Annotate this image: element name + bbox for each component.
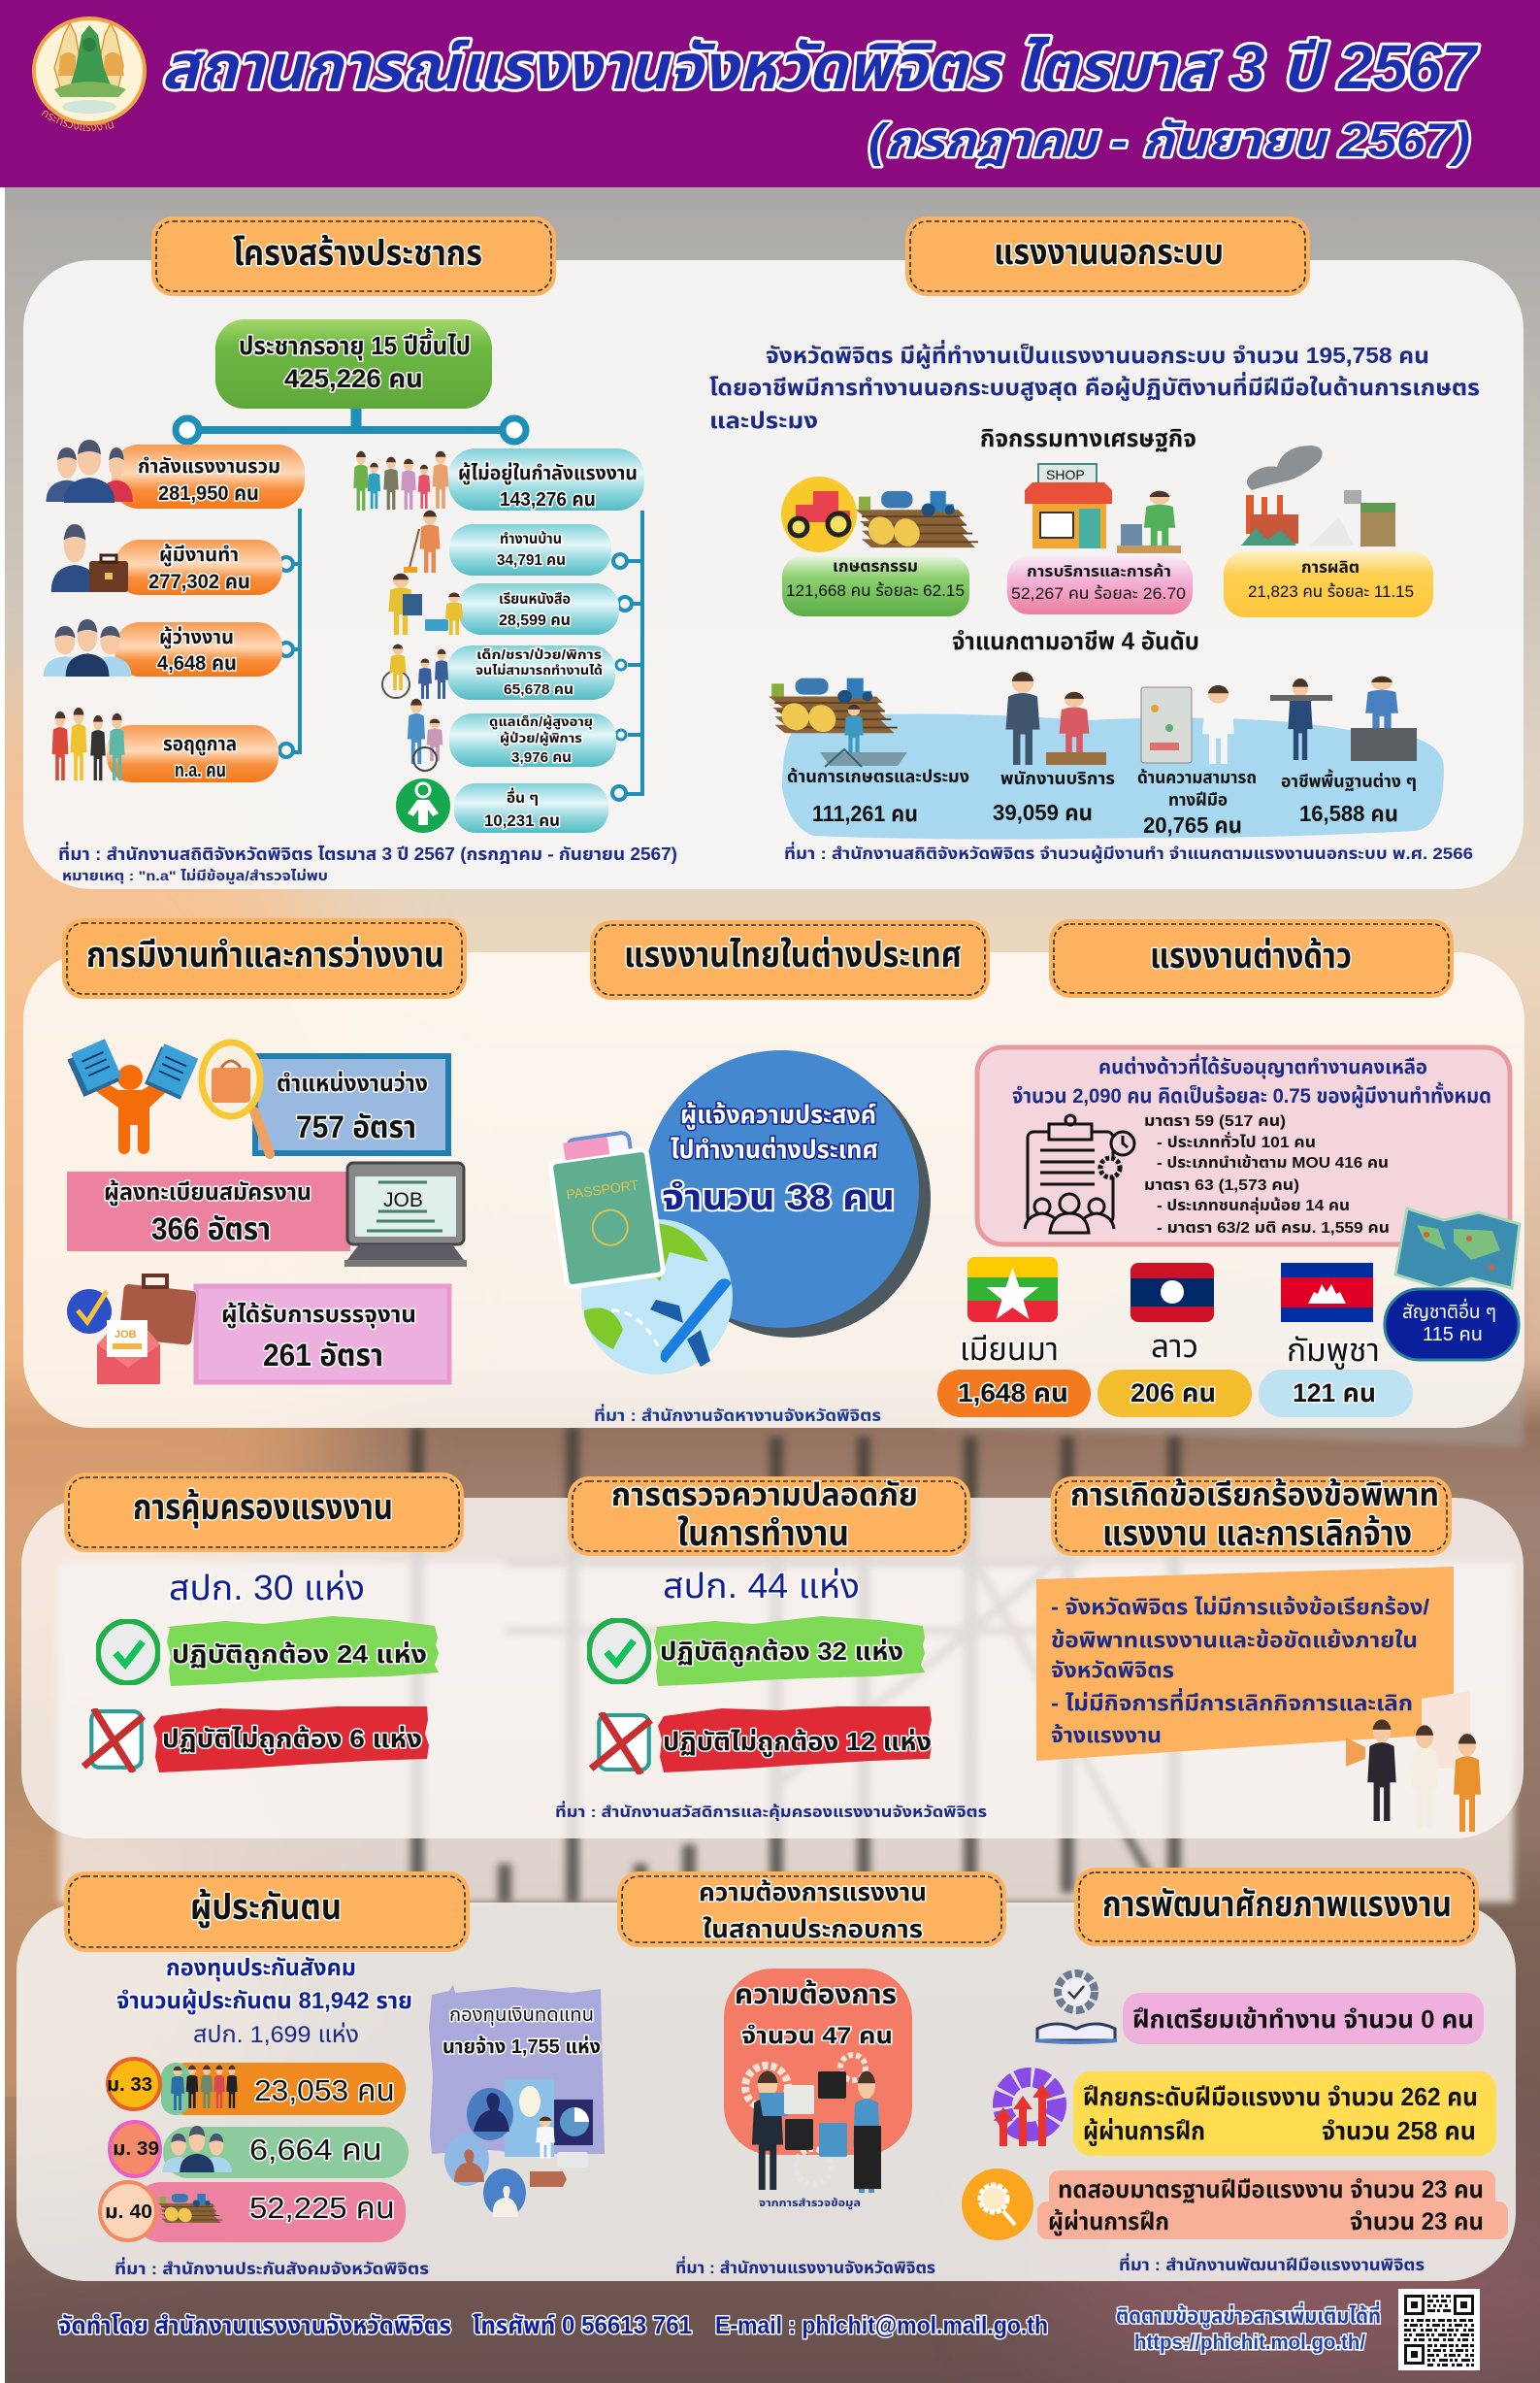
dispute note: จังหวัดพิจิตร [1051, 1658, 1174, 1682]
compliant: protection [98, 1616, 439, 1686]
job vacancies: ตำแหน่งงานว่าง [277, 1070, 428, 1097]
icon: passport [547, 1130, 664, 1287]
studying [458, 583, 619, 635]
occupation labels: ทางฝีมือ [1168, 790, 1228, 810]
icon: farming and fishing [769, 678, 907, 767]
caregiving: ดูแลเด็ก/ผู้สูงอายุ [489, 714, 593, 731]
skill standard test [1037, 2170, 1508, 2239]
foreign worker summary box: - ประเภททั่วไป 101 คน [1157, 1132, 1316, 1151]
pre-employment training: ฝึกเตรียมเข้าทำงาน จำนวน 0 คน [1132, 2004, 1474, 2034]
icon: purple gear with arrows [994, 2077, 1057, 2146]
heading: labour demand: ในสถานประกอบการ [703, 1914, 923, 1943]
not in labour force [448, 448, 644, 511]
icon: factory [1241, 446, 1395, 546]
population total box: ประชากรอายุ 15 ปีขึ้นไป [239, 328, 471, 361]
job applicants: 366 อัตรา [151, 1211, 271, 1246]
heading: disputes [1051, 1476, 1452, 1556]
workmen compensation fund: นายจ้าง 1,755 แห่ง [442, 2036, 601, 2058]
icon: magnifier and bag [202, 1043, 270, 1154]
caregiving: ผู้ป่วย/ผู้พิการ [500, 731, 582, 747]
icon: shop: SHOP [1046, 467, 1085, 482]
others: 10,231 คน [484, 811, 560, 830]
foreign worker summary box: มาตรา 63 (1,573 คน) [1144, 1177, 1299, 1194]
workmen compensation fund: กองทุนเงินทดแทน [449, 2004, 594, 2026]
occupation labels: 39,059 คน [993, 800, 1093, 825]
icon: laptop with job [344, 1163, 467, 1267]
value pill: Cambodia [1259, 1370, 1413, 1417]
panel: insured, demand and skills [16, 1868, 1516, 2281]
non-compliant: protection: ปฏิบัติไม่ถูกต้อง 6 แห่ง [162, 1724, 422, 1754]
child elder sick disabled: เด็ก/ชรา/ป่วย/พิการ [476, 647, 602, 662]
placements: ผู้ได้รับการบรรจุงาน [221, 1301, 416, 1329]
heading: disputes: แรงงาน และการเลิกจ้าง [1102, 1513, 1412, 1553]
icon: employed man [51, 524, 128, 592]
survey note: จากการสำรวจข้อมูล [759, 2197, 861, 2209]
studying: 28,599 คน [499, 612, 571, 629]
overseas workers circle: ไปทำงานต่างประเทศ [671, 1135, 878, 1164]
employed [115, 540, 282, 595]
icon: family [353, 451, 448, 511]
icon: wheelchair and elders [382, 645, 448, 699]
housework: 34,791 คน [497, 552, 566, 569]
panel: employment, overseas and foreign workers [23, 918, 1524, 1428]
non-compliant: protection [83, 1706, 429, 1772]
service and trade value [1007, 556, 1193, 614]
heading: population structure: โครงสร้างประชากร [233, 233, 482, 273]
icon: basic workers [1270, 677, 1417, 761]
child elder sick disabled: จนไม่สามารถทำงานได้ [475, 662, 603, 678]
footer: website: https://phichit.mol.go.th/ [1134, 2332, 1365, 2354]
heading: informal labour: แรงงานนอกระบบ [994, 232, 1224, 272]
occupation labels: 16,588 คน [1299, 801, 1398, 826]
manufacturing value: การผลิต [1301, 558, 1360, 577]
labour demand card: จำนวน 47 คน [741, 2023, 893, 2049]
icon: technician [1141, 685, 1234, 764]
source: labour office: ที่มา : สำนักงานแรงงานจังหวัดพิจิตร [675, 2256, 935, 2277]
social security fund text: กองทุนประกันสังคม [166, 1955, 356, 1982]
article 40 bar [100, 2182, 406, 2242]
social security fund text: จำนวนผู้ประกันตน 81,942 ราย [116, 1987, 412, 2015]
population total box: 425,226 คน [284, 364, 423, 393]
connector tree [176, 409, 642, 800]
foreign worker summary box: มาตรา 59 (517 คน) [1144, 1113, 1286, 1130]
compliant: safety: ปฏิบัติถูกต้อง 32 แห่ง [660, 1637, 903, 1667]
occupation labels: พนักงานบริการ [1000, 769, 1115, 788]
compliant: protection: ปฏิบัติถูกต้อง 24 แห่ง [172, 1639, 427, 1670]
country labels: ลาว [1151, 1328, 1198, 1364]
article 40 bar: 52,225 คน [249, 2191, 395, 2225]
other nationalities: สัญชาติอื่น ๆ [1402, 1298, 1496, 1323]
housework: ทำงานบ้าน [500, 530, 562, 547]
icon: world map [1395, 1208, 1520, 1288]
unemployed: ผู้ว่างงาน [159, 627, 234, 648]
icon: unemployed people [44, 619, 131, 677]
country labels: กัมพูชา [1287, 1332, 1380, 1370]
icon: caregiver [408, 699, 442, 771]
ministry logo: กระทรวงแรงงาน [41, 111, 115, 132]
panel: population and informal labour [23, 216, 1524, 889]
country labels: เมียนมา [960, 1331, 1059, 1367]
job applicants: ผู้ลงทะเบียนสมัครงาน [104, 1178, 311, 1207]
child elder sick disabled [447, 645, 615, 700]
article 33 bar: ม. 33 [107, 2074, 152, 2096]
agriculture value: 121,668 คน ร้อยละ 62.15 [786, 580, 965, 600]
occupation labels: 111,261 คน [812, 801, 918, 826]
icon: students [388, 574, 463, 635]
occupation labels: อาชีพพื้นฐานต่าง ๆ [1281, 769, 1417, 791]
occupation labels: ด้านการเกษตรและประมง [787, 767, 969, 786]
source: skill development: ที่มา : สำนักงานพัฒนาฝีมือแรงงานพิจิตร [1119, 2253, 1425, 2274]
heading: insured persons [64, 1871, 470, 1952]
informal labour paragraph: จังหวัดพิจิตร มีผู้ที่ทำงานเป็นแรงงานนอกระบบ จำนวน 195,758 คน [766, 340, 1429, 369]
non-compliant: safety: ปฏิบัติไม่ถูกต้อง 12 แห่ง [663, 1727, 932, 1757]
QR code [1398, 2289, 1480, 2370]
overseas workers circle: ผู้แจ้งความประสงค์ [680, 1100, 876, 1130]
foreign worker summary box: - ประเภทชนกลุ่มน้อย 14 คน [1157, 1197, 1350, 1214]
skill upgrade training [1073, 2071, 1496, 2156]
seasonal: n.a. คน [175, 760, 226, 781]
service and trade value: 52,267 คน ร้อยละ 26.70 [1011, 583, 1186, 603]
foreign worker summary box [977, 1047, 1510, 1244]
workmen compensation fund [429, 1985, 605, 2154]
heading: skill development [1074, 1868, 1479, 1946]
heading: labour demand: ความต้องการแรงงาน [699, 1877, 927, 1906]
employed: 277,302 คน [148, 571, 250, 593]
article 39 bar [110, 2122, 409, 2178]
icon: team with puzzle [745, 2055, 881, 2193]
heading: safety inspection: การตรวจความปลอดภัย [611, 1476, 918, 1512]
value pill: Myanmar: 1,648 คน [958, 1378, 1068, 1407]
dispute note: ข้อพิพาทแรงงานและข้อขัดแย้งภายใน [1051, 1628, 1418, 1652]
labour demand card [724, 1969, 912, 2155]
value pill: Laos: 206 คน [1130, 1378, 1216, 1407]
unemployed: 4,648 คน [157, 652, 237, 675]
source: informal labour: ที่มา : สำนักงานสถิติจังหวัดพิจิตร จำนวนผู้มีงานทำ จำแนกตามแรงงานนอกระบบ พ.ศ. 2566 [784, 842, 1473, 864]
heading: foreign workers: แรงงานต่างด้าว [1150, 936, 1352, 976]
heading: labour demand [617, 1871, 1006, 1947]
studying: เรียนหนังสือ [499, 591, 571, 608]
heading: insured persons: ผู้ประกันตน [190, 1887, 342, 1928]
icon: gear and book [1035, 1973, 1117, 2042]
other nationalities: 115 คน [1423, 1324, 1483, 1345]
country labels [960, 1328, 1380, 1370]
population total box [215, 319, 492, 409]
article 40 bar: ม. 40 [105, 2201, 152, 2223]
skill standard test: ผู้ผ่านการฝึก [1048, 2208, 1169, 2236]
service and trade value: การบริการและการค้า [1027, 563, 1171, 580]
icon: people and ideas [444, 2079, 593, 2217]
icon: globe and plane [581, 1219, 733, 1374]
flag: Cambodia [1281, 1263, 1373, 1322]
skill upgrade training: ผู้ผ่านการฝึก [1083, 2116, 1205, 2146]
footer: organisation contact [58, 2312, 1048, 2339]
article 39 bar: 6,664 คน [249, 2133, 382, 2167]
skill standard test: ทดสอบมาตรฐานฝีมือแรงงาน จำนวน 23 คน [1058, 2176, 1484, 2203]
occupation labels [787, 767, 1417, 838]
occupations band [769, 672, 1444, 840]
not in labour force: ผู้ไม่อยู่ในกำลังแรงงาน [458, 463, 638, 484]
labour force [112, 445, 305, 509]
heading: population structure [151, 216, 556, 296]
icon: laptop with job: JOB [383, 1189, 423, 1211]
footer: organisation contact: E-mail : phichit@mol.mail.go.th [715, 2312, 1048, 2339]
foreign worker summary box: - มาตรา 63/2 มติ ครม. 1,559 คน [1157, 1220, 1390, 1237]
icon: seasonal people [52, 708, 125, 780]
dispute note: - ไม่มีกิจการที่มีการเลิกกิจการและเลิก [1051, 1688, 1413, 1715]
skill upgrade training: จำนวน 258 คน [1322, 2116, 1476, 2145]
flag: Myanmar [967, 1257, 1058, 1322]
informal labour paragraph [709, 340, 1480, 433]
article 39 bar: ม. 39 [113, 2138, 159, 2160]
manufacturing value [1224, 551, 1433, 617]
dispute note: จ้างแรงงาน [1051, 1723, 1162, 1747]
subheading: economic activity: กิจกรรมทางเศรษฐกิจ [980, 425, 1196, 452]
housework [449, 524, 611, 576]
foreign worker summary box: จำนวน 2,090 คน คิดเป็นร้อยละ 0.75 ของผู้มีงานทำทั้งหมด [1012, 1082, 1491, 1109]
heading: Thai workers abroad: แรงงานไทยในต่างประเทศ [624, 935, 962, 975]
icon: person holding papers [66, 1039, 198, 1154]
icon: passport: PASSPORT [565, 1176, 639, 1203]
others [454, 783, 608, 833]
source: social security: ที่มา : สำนักงานประกันสังคมจังหวัดพิจิตร [115, 2257, 429, 2278]
heading: labour protection: การคุ้มครองแรงงาน [133, 1487, 393, 1528]
agriculture value [782, 555, 969, 616]
other nationalities [1385, 1289, 1519, 1360]
heading: disputes: การเกิดข้อเรียกร้องข้อพิพาท [1070, 1476, 1439, 1512]
header band [0, 0, 1540, 187]
job vacancies: 757 อัตรา [296, 1109, 416, 1144]
subtitle: (กรกฎาคม - กันยายน 2567) [868, 116, 1470, 167]
placements [196, 1286, 449, 1382]
compliant: safety [589, 1616, 925, 1686]
non-compliant: safety [591, 1706, 932, 1774]
job applicants [67, 1172, 350, 1251]
note: หมายเหตุ : "n.a" ไม่มีข้อมูล/สำรวจไม่พบ [62, 868, 328, 885]
icon: person in green circle [396, 778, 450, 833]
not in labour force: 143,276 คน [500, 489, 596, 511]
value pill: Laos [1098, 1370, 1252, 1417]
labour force: 281,950 คน [158, 482, 259, 505]
caregiving [449, 713, 616, 767]
icon: farm with tractor [781, 477, 978, 552]
icon: check, briefcase and envelope: JOB [115, 1329, 137, 1340]
footer: website: ติดตามข้อมูลข่าวสารเพิ่มเติมได้ที่ [1116, 2301, 1381, 2329]
unemployed [115, 622, 282, 677]
value pill: Cambodia: 121 คน [1293, 1378, 1376, 1407]
informal labour paragraph: โดยอาชีพมีการทำงานนอกระบบสูงสุด คือผู้ปฏิบัติงานที่มีฝีมือในด้านการเกษตร [709, 372, 1480, 401]
icon: shop [1025, 464, 1181, 553]
occupation labels: ด้านความสามารถ [1137, 768, 1257, 787]
value pill: Myanmar [937, 1370, 1091, 1417]
source: population: ที่มา : สำนักงานสถิติจังหวัดพิจิตร ไตรมาส 3 ปี 2567 (กรกฎาคม - กันยายน 2567) [58, 842, 677, 864]
employed: ผู้มีงานทำ [159, 545, 239, 566]
heading: safety inspection: ในการทำงาน [677, 1513, 849, 1553]
title: สถานการณ์แรงงานจังหวัดพิจิตร ไตรมาส 3 ปี 2567 [161, 32, 1479, 102]
panel: protection, safety and disputes [21, 1473, 1524, 1838]
caregiving: 3,976 คน [511, 749, 572, 766]
subheading: top four occupations: จำแนกตามอาชีพ 4 อันดับ [952, 628, 1199, 655]
heading: Thai workers abroad [590, 920, 990, 1000]
source: protection: ที่มา : สำนักงานสวัสดิการและคุ้มครองแรงงานจังหวัดพิจิตร [555, 1801, 987, 1821]
foreign worker summary box: - ประเภทนำเข้าตาม MOU 416 คน [1157, 1154, 1389, 1172]
placements: 261 อัตรา [263, 1338, 383, 1373]
child elder sick disabled: 65,678 คน [504, 681, 573, 698]
heading: foreign workers [1049, 919, 1454, 998]
icon: test badge [962, 2168, 1033, 2240]
icon: labour force people [47, 440, 133, 503]
heading: skill development: การพัฒนาศักยภาพแรงงาน [1102, 1884, 1452, 1924]
overseas workers circle [643, 1050, 931, 1338]
skill standard test: จำนวน 23 คน [1350, 2208, 1484, 2235]
icon: sweeping person [404, 511, 441, 573]
agriculture value: เกษตรกรรม [833, 557, 918, 576]
footer: organisation contact: โทรศัพท์ 0 56613 761 [473, 2312, 692, 2339]
icon: protesters [1346, 1691, 1481, 1832]
dispute note: - จังหวัดพิจิตร ไม่มีการแจ้งข้อเรียกร้อง/ [1051, 1595, 1429, 1619]
others: อื่น ๆ [507, 787, 539, 807]
icon: check, briefcase and envelope [67, 1275, 197, 1384]
article 33 bar: 23,053 คน [254, 2073, 395, 2107]
protection establishments: สปก. 30 แห่ง [169, 1568, 365, 1607]
icon: service workers [1005, 672, 1106, 765]
footer: website [1116, 2301, 1381, 2354]
informal labour paragraph: และประมง [709, 408, 818, 433]
heading: safety inspection [568, 1476, 970, 1556]
seasonal: รอฤดูกาล [163, 734, 237, 755]
footer: organisation contact: จัดทำโดย สำนักงานแรงงานจังหวัดพิจิตร [58, 2312, 451, 2339]
icon: clipboard with people [1025, 1115, 1134, 1233]
skill upgrade training: ฝึกยกระดับฝีมือแรงงาน จำนวน 262 คน [1083, 2082, 1478, 2111]
labour demand card: ความต้องการ [735, 1979, 897, 2009]
heading: employment [62, 918, 467, 999]
seasonal [107, 725, 279, 782]
dispute note [1036, 1567, 1454, 1761]
flag: Laos [1130, 1263, 1214, 1322]
heading: employment: การมีงานทำและการว่างงาน [86, 935, 444, 975]
overseas workers circle: จำนวน 38 คน [662, 1177, 895, 1217]
manufacturing value: 21,823 คน ร้อยละ 11.15 [1248, 581, 1414, 601]
social security fund text: สปก. 1,699 แห่ง [193, 2021, 359, 2048]
ministry logo [32, 17, 147, 132]
source: employment: ที่มา : สำนักงานจัดหางานจังหวัดพิจิตร [594, 1404, 881, 1425]
heading: labour protection [64, 1473, 464, 1552]
labour force: กำลังแรงงานรวม [138, 456, 280, 478]
heading: informal labour [905, 216, 1310, 296]
social security fund text [116, 1955, 412, 2048]
job vacancies [255, 1056, 448, 1153]
occupation labels: 20,765 คน [1143, 812, 1242, 838]
foreign worker summary box: คนต่างด้าวที่ได้รับอนุญาตทำงานคงเหลือ [1098, 1053, 1427, 1078]
safety establishments: สปก. 44 แห่ง [663, 1566, 860, 1605]
pre-employment training [1123, 1993, 1484, 2044]
article 33 bar [107, 2059, 406, 2115]
